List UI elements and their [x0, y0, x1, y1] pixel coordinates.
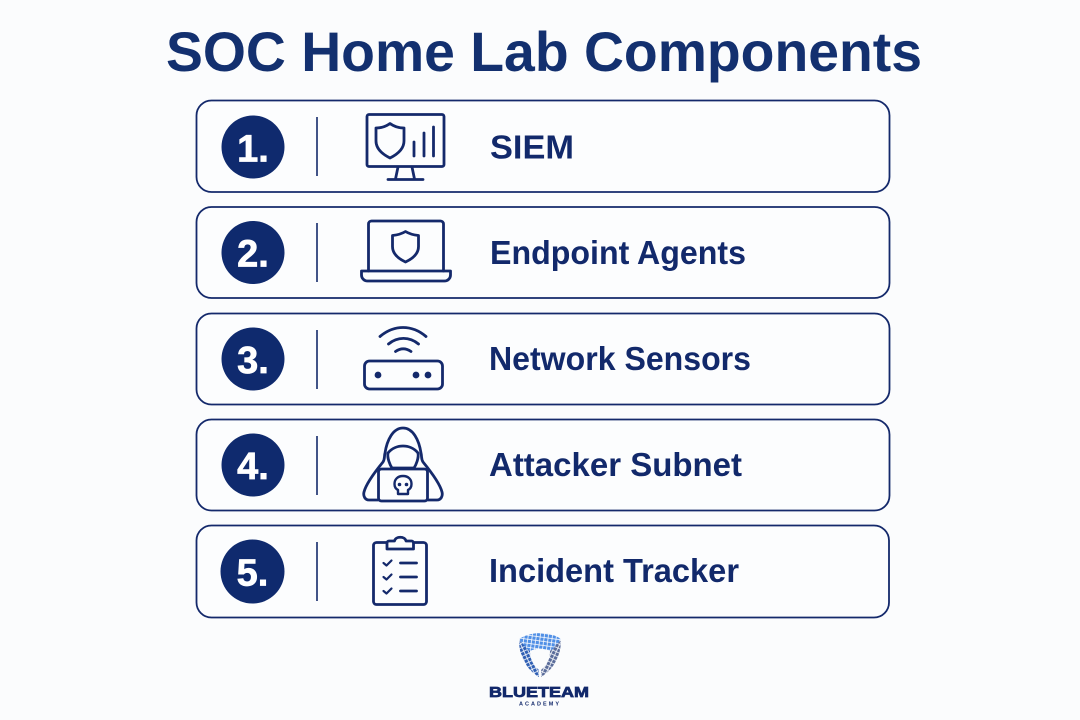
number badge 5: 5.: [237, 552, 268, 594]
number badge 3: [222, 328, 284, 390]
panel: SIEM: [196, 100, 890, 192]
panel: Endpoint Agents: [196, 207, 890, 298]
number badge 4: 4.: [237, 446, 269, 488]
number badge 1: [222, 116, 284, 178]
icon: hooded attacker with laptop: [364, 428, 442, 501]
icon: router with wifi: [364, 328, 442, 389]
label: Attacker Subnet: Attacker Subnet: [489, 446, 742, 483]
logo: BlueTeam Academy: [489, 633, 589, 708]
label: Incident Tracker: Incident Tracker: [489, 552, 739, 589]
icon: clipboard checklist: [374, 537, 426, 604]
number badge 5: [220, 540, 284, 604]
number badge 2: 2.: [237, 234, 269, 276]
number badge 2: [222, 221, 284, 284]
panel: Network Sensors: [196, 314, 890, 404]
number badge 4: [222, 434, 284, 496]
tagline: ACADEMY: [519, 702, 559, 708]
label: Network Sensors: Network Sensors: [489, 340, 751, 377]
panel: Incident Tracker: [196, 526, 889, 618]
label: Endpoint Agents: Endpoint Agents: [490, 234, 746, 271]
title: SOC Home Lab Components: [166, 20, 922, 83]
number badge 3: 3.: [237, 340, 269, 382]
icon: laptop with shield: [362, 221, 450, 281]
label: SIEM: SIEM: [490, 128, 574, 166]
wordmark: BLUETEAM: [489, 685, 589, 701]
icon: pixel shield: [519, 633, 561, 677]
icon: monitor with shield and bars: [367, 114, 444, 180]
panel: Attacker Subnet: [196, 420, 890, 510]
number badge 1: 1.: [237, 128, 269, 170]
